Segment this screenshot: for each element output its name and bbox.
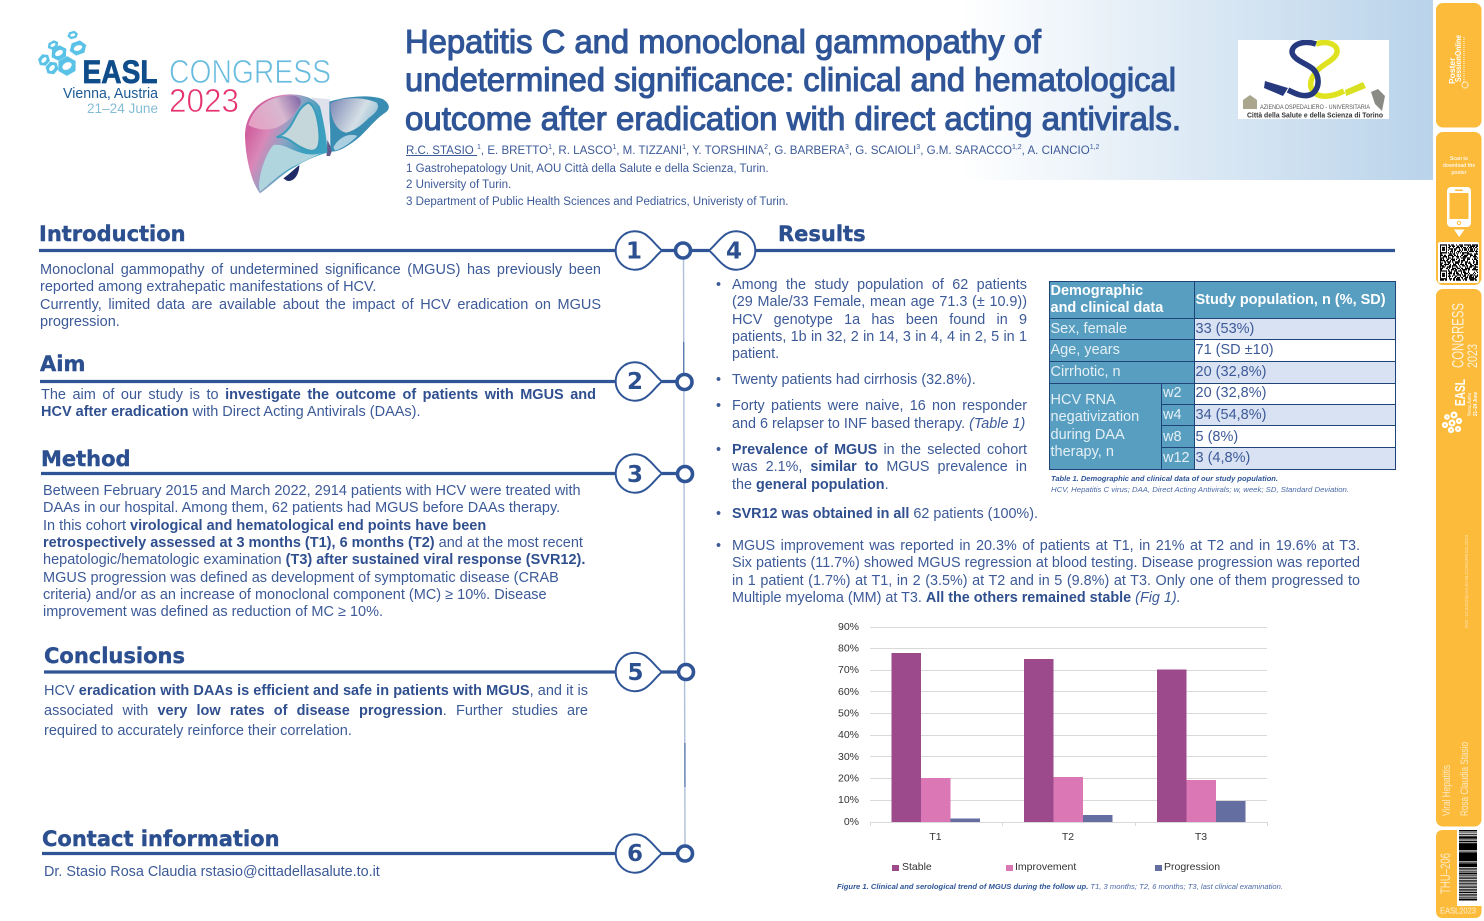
sidebar <box>1436 3 1482 918</box>
y axis labels: 10% <box>838 794 859 806</box>
results bullet 2: • <box>716 372 721 388</box>
results bullet 3: Forty patients were naive, 16 non responder <box>732 398 1027 414</box>
results bullet 1: • <box>716 277 721 293</box>
heading: Method: Method <box>41 447 131 471</box>
method text: hepatologic/hematologic examination (T3) after sustained viral response (SVR12). <box>43 552 585 568</box>
panel: scan to download: download the <box>1443 163 1475 169</box>
heading: Aim: Aim <box>40 352 85 376</box>
results bullet 1: patients, 1b in 32, 2 in 14, 3 in 4, 4 in 2, 5 in 1 <box>732 329 1027 345</box>
conclusions text: HCV eradication with DAAs is efficient and safe in patients with MGUS, and it is <box>44 683 588 699</box>
results bullet 1: HCV genotype 1a has been found in 9 <box>732 312 1027 328</box>
results bullet 2: Twenty patients had cirrhosis (32.8%). <box>732 372 976 388</box>
connector 5: 5 <box>627 660 644 686</box>
connector 6 <box>42 834 692 873</box>
y axis labels: 0% <box>844 816 859 828</box>
panel: poster number and barcode: THU–206 <box>1437 853 1453 894</box>
y axis labels: 20% <box>838 772 859 784</box>
panel: EASL congress and viral hepatitis: 21–24 June <box>1473 392 1479 416</box>
heading: Results: Results <box>778 222 866 246</box>
results bullet 5: SVR12 was obtained in all 62 patients (100%). <box>732 506 1038 522</box>
connector 6: 6 <box>627 841 643 867</box>
method text: MGUS progression was defined as development of symptomatic disease (CRAB <box>43 570 559 586</box>
results bullet 3: and 6 relapser to INF based therapy. (Table 1) <box>732 416 1025 432</box>
table 1: demographic and clinical data: 34 (54,8%) <box>1196 407 1266 423</box>
panel: poster session online: Poster <box>1447 57 1457 84</box>
results bullet 5: • <box>716 506 721 522</box>
method text: improvement was defined as reduction of MC ≥ 10%. <box>43 604 383 620</box>
table 1: demographic and clinical data: negativization <box>1050 409 1139 425</box>
results bullet 6: • <box>716 538 721 554</box>
table caption: Table 1. Demographic and clinical data of our study population. <box>1051 474 1278 483</box>
table 1: demographic and clinical data: 71 (SD ±10) <box>1196 342 1274 358</box>
y axis labels: 40% <box>838 729 859 741</box>
affiliation 3: 3 Department of Public Health Sciences and Pediatrics, Univeristy of Turin. <box>406 196 789 208</box>
results bullet 4: the general population. <box>732 477 889 493</box>
introduction text: progression. <box>40 314 120 330</box>
liver illustration <box>245 94 389 194</box>
figure 1: bar chart <box>838 621 1268 873</box>
table 1: demographic and clinical data: 20 (32,8%) <box>1196 364 1266 380</box>
icon: EASL hexagons <box>1443 413 1461 432</box>
EASL Congress logo: 2023 <box>169 82 239 119</box>
results bullet 4: was 2.1%, similar to MGUS prevalence in <box>732 459 1027 475</box>
icon: phone <box>1447 187 1471 237</box>
aim text: The aim of our study is to investigate the outcome of patients with MGUS and <box>41 387 596 403</box>
connector 2 <box>40 362 692 401</box>
table caption: HCV, Hepatitis C virus; DAA, Direct Acting Antivirals; w, week; SD, Standard Deviation. <box>1051 485 1349 494</box>
header gradient band <box>0 0 1433 180</box>
legend: Improvement <box>1015 861 1076 873</box>
table 1: demographic and clinical data: w12 <box>1163 450 1190 466</box>
panel: poster number and barcode: EASL2023 <box>1440 906 1477 916</box>
legend: Stable <box>902 861 932 873</box>
title: outcome after eradication with direct acting antivirals. <box>405 100 1181 137</box>
results bullet 6 <box>716 538 1360 606</box>
results bullet 6: MGUS improvement was reported in 20.3% of patients at T1, in 21% at T2 and in 19.6% at T3. <box>732 538 1360 554</box>
contact text: Dr. Stasio Rosa Claudia rstasio@cittadellasalute.to.it <box>44 864 380 880</box>
results bullet 1: Among the study population of 62 patients <box>732 277 1027 293</box>
panel: scan to download: poster <box>1451 170 1467 176</box>
panel: EASL congress and viral hepatitis: Vienna, Austria <box>1467 393 1473 416</box>
hospital logo <box>1238 40 1389 120</box>
bars: stable <box>892 653 1186 822</box>
method text: Between February 2015 and March 2022, 2914 patients with HCV were treated with <box>43 483 581 499</box>
table 1: demographic and clinical data: Study population, n (%, SD) <box>1196 292 1386 308</box>
affiliation 1: 1 Gastrohepatology Unit, AOU Città della Salute e della Scienza, Turin. <box>406 163 769 175</box>
method text: criteria) and/or as an increase of monoclonal component (MC) ≥ 10%. Disease <box>43 587 547 603</box>
y axis labels: 80% <box>838 642 859 654</box>
y axis labels: 70% <box>838 664 859 676</box>
panel: poster session online: SessionOnline <box>1454 35 1463 82</box>
connector 3: 3 <box>627 462 643 488</box>
introduction text <box>40 262 601 330</box>
y axis labels: 90% <box>838 621 859 633</box>
results bullet 6: in 1 patient (1.7%) at T1, in 2 (3.5%) at T2 and in 5 (9.8%) at T3. Only one of them progressed to <box>732 573 1360 589</box>
table 1: demographic and clinical data: Cirrhotic, n <box>1050 364 1121 380</box>
results bullet 6: Multiple myeloma (MM) at T3. All the others remained stable (Fig 1). <box>732 590 1181 606</box>
EASL Congress logo: 21–24 June <box>87 100 158 116</box>
panel: EASL congress and viral hepatitis: 2023 <box>1465 344 1480 368</box>
x axis labels: T1 <box>929 831 942 843</box>
results bullet 3: • <box>716 398 721 414</box>
y axis labels <box>838 621 859 828</box>
table 1: demographic and clinical data: 20 (32,8%) <box>1196 385 1266 401</box>
connector 4 <box>691 231 1395 270</box>
y axis labels: 30% <box>838 751 859 763</box>
table 1: demographic and clinical data <box>1049 281 1396 470</box>
EASL Congress logo: EASL <box>82 54 158 90</box>
connector 4: 4 <box>726 238 742 264</box>
table 1: demographic and clinical data: during DAA <box>1050 427 1125 443</box>
connector 5 <box>44 653 694 691</box>
table 1: demographic and clinical data: therapy, n <box>1050 444 1114 460</box>
connector 1 <box>39 231 690 270</box>
table 1: demographic and clinical data: Sex, female <box>1050 321 1127 337</box>
table 1: demographic and clinical data: HCV RNA <box>1050 392 1116 408</box>
connector 3 <box>41 454 692 493</box>
conclusions text <box>44 683 588 739</box>
authors: R.C. STASIO 1, E. BRETTO1, R. LASCO1, M. TIZZANI1, Y. TORSHINA2, G. BARBERA3, G. SCAIOLI3, G.M. SARACCO1,2, A. CIANCIO1,2 <box>406 144 1099 157</box>
x axis labels: T2 <box>1062 831 1074 843</box>
panel: poster number and barcode <box>1436 830 1482 918</box>
conclusions text: associated with very low rates of disease progression. Further studies are <box>44 703 588 719</box>
bars: progression <box>950 801 1246 822</box>
heading: Contact information: Contact information <box>42 827 280 851</box>
panel: scan to download <box>1436 132 1482 285</box>
x axis labels <box>929 831 1207 843</box>
results bullet 1 <box>716 277 1027 362</box>
table 1: demographic and clinical data: w4 <box>1163 407 1182 423</box>
title <box>405 23 1181 138</box>
hospital logo: AZIENDA OSPEDALIERO - UNIVERSITARIA <box>1260 105 1370 111</box>
introduction text: Currently, limited data are available about the impact of HCV eradication on MGUS <box>40 297 601 313</box>
results bullet 4: • <box>716 442 721 458</box>
figure caption: Figure 1. Clinical and serological trend of MGUS during the follow up. T1, 3 months; T2, 6 months; T3, last clinical examination. <box>837 882 1283 891</box>
connector 2: 2 <box>627 369 643 395</box>
title: Hepatitis C and monoclonal gammopathy of <box>405 23 1042 60</box>
legend: Progression <box>1164 861 1220 873</box>
method text: retrospectively assessed at 3 months (T1), 6 months (T2) and at the most recent <box>43 535 583 551</box>
legend <box>892 861 1220 873</box>
results bullet 6: Six patients (11.7%) showed MGUS regression at blood testing. Disease progression was reported <box>732 555 1360 571</box>
panel: EASL congress and viral hepatitis <box>1436 289 1482 826</box>
method text: DAAs in our hospital. Among them, 62 patients had MGUS before DAAs therapy. <box>43 500 560 516</box>
panel: EASL congress and viral hepatitis: Rosa Claudia Stasio <box>1459 742 1471 816</box>
table caption <box>1051 474 1349 494</box>
table 1: demographic and clinical data: and clinical data <box>1050 300 1163 316</box>
EASL Congress logo: Vienna, Austria <box>63 85 159 102</box>
table 1: demographic and clinical data: Age, years <box>1050 342 1120 358</box>
y axis labels: 60% <box>838 686 859 698</box>
panel: EASL congress and viral hepatitis: CONGRESS <box>1450 303 1468 368</box>
x axis labels: T3 <box>1195 831 1207 843</box>
results bullet 4: Prevalence of MGUS in the selected cohort <box>732 442 1027 458</box>
results bullet 4 <box>716 442 1027 493</box>
panel: poster session online <box>1436 3 1482 128</box>
aim text: HCV after eradication with Direct Acting Antivirals (DAAs). <box>41 404 421 420</box>
panel: scan to download: Scan to <box>1450 156 1468 162</box>
conclusions text: required to accurately reinforce their correlation. <box>44 723 352 739</box>
title: undetermined significance: clinical and hematological <box>405 61 1176 98</box>
panel: EASL congress and viral hepatitis: DOI: 10.3252/pcon.EASLCONGRESS.2023 <box>1464 535 1470 628</box>
results bullet 3 <box>716 398 1027 432</box>
table 1: demographic and clinical data: 3 (4,8%) <box>1196 450 1250 466</box>
heading: Introduction: Introduction <box>39 222 186 246</box>
method text: In this cohort virological and hematological end points have been <box>43 518 486 534</box>
panel: EASL congress and viral hepatitis: Viral Hepatitis <box>1441 765 1453 816</box>
aim text <box>41 387 596 420</box>
QR code <box>1438 242 1479 283</box>
table 1: demographic and clinical data: Demographic <box>1050 283 1143 299</box>
introduction text: reported among extrahepatic manifestations of HCV. <box>40 279 376 295</box>
table 1: demographic and clinical data: w2 <box>1163 385 1182 401</box>
table 1: demographic and clinical data: 33 (53%) <box>1196 321 1254 337</box>
results bullet 1: (29 Male/33 Female, mean age 71.3 (± 10.9)) <box>732 294 1027 310</box>
affiliation 2: 2 University of Turin. <box>406 179 511 191</box>
table 1: demographic and clinical data: 5 (8%) <box>1196 429 1238 445</box>
results bullet 1: patient. <box>732 346 779 362</box>
method text <box>43 483 585 620</box>
table 1: demographic and clinical data: w8 <box>1163 429 1182 445</box>
y axis labels: 50% <box>838 708 859 720</box>
bars: improvement <box>921 777 1216 822</box>
connector 1: 1 <box>626 238 642 264</box>
introduction text: Monoclonal gammopathy of undetermined significance (MGUS) has previously been <box>40 262 601 278</box>
heading: Conclusions: Conclusions <box>44 644 185 668</box>
EASL Congress logo <box>38 30 331 119</box>
panel: EASL congress and viral hepatitis: EASL <box>1452 379 1469 406</box>
